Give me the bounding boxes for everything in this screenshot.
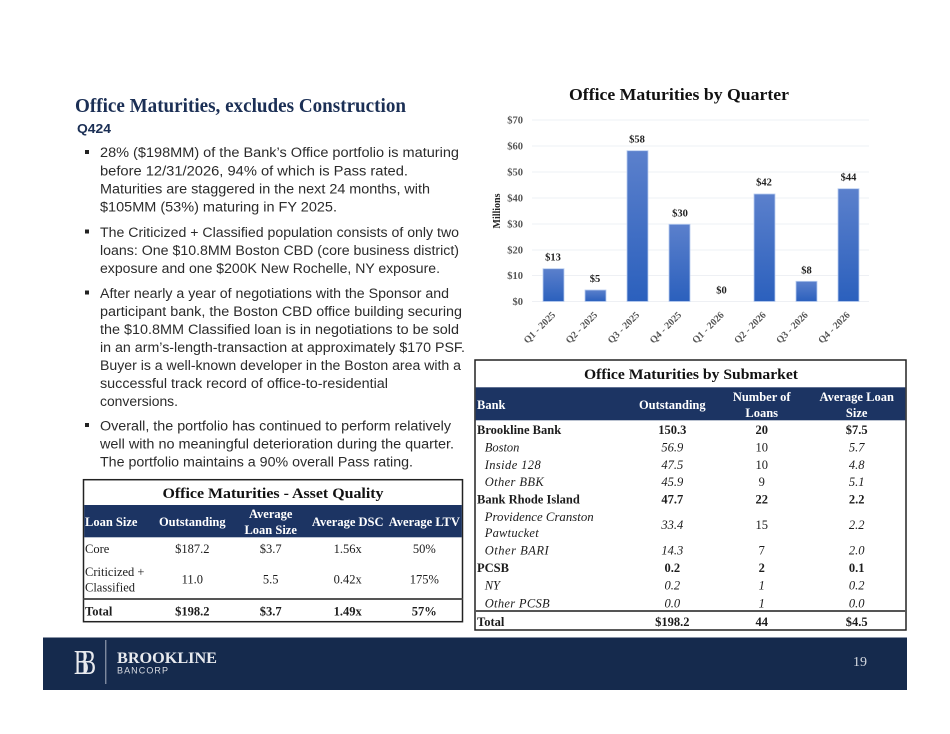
table rows: Bank Rhode Island [477, 492, 580, 506]
table rows: 2.2 [849, 492, 865, 506]
table rows: $3.7 [260, 542, 282, 556]
table total row [477, 615, 868, 629]
icon: BB logo mark: B [74, 643, 89, 682]
bullet 3: conversions. [100, 394, 178, 410]
table header: Outstanding [639, 398, 706, 412]
table rows: Other BBK [485, 475, 544, 489]
table rows: 0.0 [849, 596, 865, 610]
y axis labels: $10 [507, 271, 523, 282]
footer band [43, 638, 907, 690]
table header [84, 505, 462, 537]
icon: BB logo mark: B [81, 643, 96, 682]
y axis labels: $0 [512, 297, 523, 308]
table header: Size [846, 406, 868, 420]
chart title: Office Maturities by Quarter [569, 85, 789, 104]
y axis labels: $30 [507, 220, 523, 230]
text block: bullet points [85, 145, 465, 470]
table rows: 22 [755, 492, 768, 506]
value labels: $44 [841, 172, 857, 184]
table rows: 33.4 [660, 518, 683, 532]
bullet 3: Buyer is a well-known developer in the Boston area with a [100, 358, 461, 374]
x axis labels: Q4 - 2026 [816, 310, 853, 346]
table rows: 15 [755, 518, 768, 532]
table rows: 2.2 [849, 518, 865, 532]
table header: Outstanding [159, 515, 226, 529]
table total row: Total [477, 615, 505, 629]
table total row: $3.7 [260, 604, 282, 618]
table header: Number of [733, 390, 791, 404]
table header: Average LTV [389, 515, 460, 529]
table rows: NY [484, 578, 502, 592]
table rows: 0.2 [664, 561, 680, 575]
table rows: 0.42x [334, 572, 363, 586]
table rows: 10 [755, 440, 768, 454]
bars [543, 151, 859, 302]
table rows: Boston [485, 440, 519, 454]
table rows: Other PCSB [485, 596, 550, 610]
table header: Average DSC [312, 515, 384, 529]
y axis labels: $70 [507, 116, 523, 126]
bullet 3: successful track record of office-to-residential [100, 376, 388, 392]
logo wordmark: BANCORP [117, 666, 168, 676]
table rows: 7 [759, 544, 765, 558]
table total row: $198.2 [175, 604, 209, 618]
table rows: 56.9 [661, 440, 684, 454]
logo wordmark [117, 650, 217, 676]
table rows: 20 [755, 423, 768, 437]
table total row: 44 [755, 615, 769, 629]
table: Office Maturities by Submarket [475, 360, 906, 630]
y axis title: Millions [492, 193, 503, 229]
bullet 3: participant bank, the Boston CBD office building securing [100, 304, 462, 320]
subtitle: Q424: Q424 [77, 121, 112, 136]
table rows: 5.1 [849, 475, 865, 489]
value labels: $0 [716, 286, 727, 296]
table rows: 0.0 [664, 596, 681, 610]
bullet 1 [85, 145, 459, 216]
x axis labels [522, 310, 853, 346]
value labels [545, 134, 857, 296]
bullet 4: well with no meaningful deterioration during the quarter. [99, 436, 454, 452]
table total row [85, 604, 437, 618]
bullet 1: Maturities are staggered in the next 24 months, with [100, 182, 430, 198]
bullet 1: 28% ($198MM) of the Bank’s Office portfolio is maturing [100, 145, 459, 161]
value labels: $30 [672, 208, 688, 220]
bullet 1: $105MM (53%) maturing in FY 2025. [100, 200, 337, 216]
table rows: 2 [759, 561, 765, 575]
table rows: 4.8 [849, 458, 865, 472]
table rows: PCSB [477, 561, 509, 575]
table rows: Inside 128 [484, 458, 541, 472]
bullet 3: the $10.8MM Classified loan is in negotiations to be sold [100, 322, 459, 338]
value labels: $42 [756, 178, 772, 188]
table rows: 47.7 [661, 492, 683, 506]
chart: Office Maturities by Quarter [492, 85, 869, 346]
table rows: 9 [759, 475, 765, 489]
y axis labels: $20 [507, 246, 523, 256]
value labels: $5 [590, 274, 600, 285]
table rows [85, 542, 439, 594]
x axis labels: Q3 - 2025 [606, 310, 642, 346]
table header: Average [249, 507, 293, 521]
table rows [477, 423, 868, 610]
table rows: 1.56x [334, 542, 363, 556]
table total row: 57% [412, 604, 437, 618]
x axis labels: Q3 - 2026 [774, 310, 811, 346]
table rows: 0.2 [849, 578, 865, 592]
table rows: Providence Cranston [484, 510, 594, 524]
table rows: Criticized + [85, 565, 144, 579]
title: Office Maturities, excludes Construction [75, 95, 406, 117]
bullet 4: Overall, the portfolio has continued to perform relatively [100, 418, 452, 434]
table rows: Core [85, 542, 110, 556]
logo wordmark: BROOKLINE [117, 650, 217, 667]
bullet 1: before 12/31/2026, 94% of which is Pass rated. [100, 164, 408, 180]
table rows: 45.9 [661, 475, 684, 489]
table rows: 14.3 [661, 544, 683, 558]
table rows: Brookline Bank [477, 423, 561, 437]
x axis labels: Q2 - 2025 [564, 310, 600, 346]
table total row: $4.5 [846, 615, 868, 629]
y axis labels [507, 116, 523, 308]
table rows: 0.1 [849, 561, 865, 575]
bullet 2: loans: One $10.8MM Boston CBD (core business district) [100, 243, 459, 259]
table title: Office Maturities - Asset Quality [162, 486, 384, 502]
table rows: 2.0 [849, 544, 865, 558]
table total row: 1.49x [334, 604, 363, 618]
y axis labels: $40 [507, 194, 523, 204]
y axis labels: $50 [507, 168, 523, 178]
bullet 4 [85, 418, 454, 470]
table header [476, 387, 905, 420]
table rows: Other BARI [485, 544, 550, 558]
table title: Office Maturities by Submarket [584, 367, 798, 383]
y axis labels: $60 [507, 142, 523, 152]
table rows: 1 [759, 578, 765, 592]
table rows: 5.7 [849, 440, 865, 454]
table: Office Maturities - Asset Quality [84, 480, 462, 622]
table rows: $7.5 [846, 423, 868, 437]
table total row: Total [85, 604, 113, 618]
table header: Loan Size [85, 515, 138, 529]
value labels: $8 [801, 266, 812, 276]
table rows: Classified [85, 580, 136, 594]
x axis labels: Q1 - 2026 [690, 310, 727, 346]
table rows: 10 [755, 458, 768, 472]
table rows: 47.5 [661, 458, 683, 472]
x axis labels: Q4 - 2025 [648, 310, 684, 346]
table rows: Pawtucket [484, 526, 539, 540]
table total row: $198.2 [655, 615, 689, 629]
bullet 3: After nearly a year of negotiations with the Sponsor and [100, 286, 449, 302]
table header: Loan Size [244, 523, 297, 537]
table rows: 0.2 [664, 578, 680, 592]
value labels: $58 [629, 134, 645, 146]
table rows: $187.2 [175, 542, 209, 556]
table rows: 175% [410, 572, 439, 586]
bullet 3: in an arm’s-length-transaction at approximately $170 PSF. [100, 340, 465, 356]
bullet 2: The Criticized + Classified population consists of only two [100, 225, 459, 241]
table header: Average Loan [819, 390, 894, 404]
table header: Loans [745, 406, 778, 420]
bullet 2: exposure and one $200K New Rochelle, NY exposure. [100, 261, 440, 277]
table rows: 150.3 [658, 423, 686, 437]
table rows: 11.0 [182, 572, 203, 586]
bullet 4: The portfolio maintains a 90% overall Pass rating. [100, 454, 413, 470]
page number: 19 [853, 655, 867, 670]
bullet 2 [85, 225, 459, 277]
bullet 3 [85, 286, 465, 410]
value labels: $13 [545, 252, 561, 264]
x axis labels: Q2 - 2026 [732, 310, 769, 346]
table rows: 1 [759, 596, 765, 610]
table rows: 50% [413, 542, 436, 556]
table header: Bank [477, 398, 506, 412]
x axis labels: Q1 - 2025 [522, 310, 558, 346]
table rows: 5.5 [263, 572, 279, 586]
